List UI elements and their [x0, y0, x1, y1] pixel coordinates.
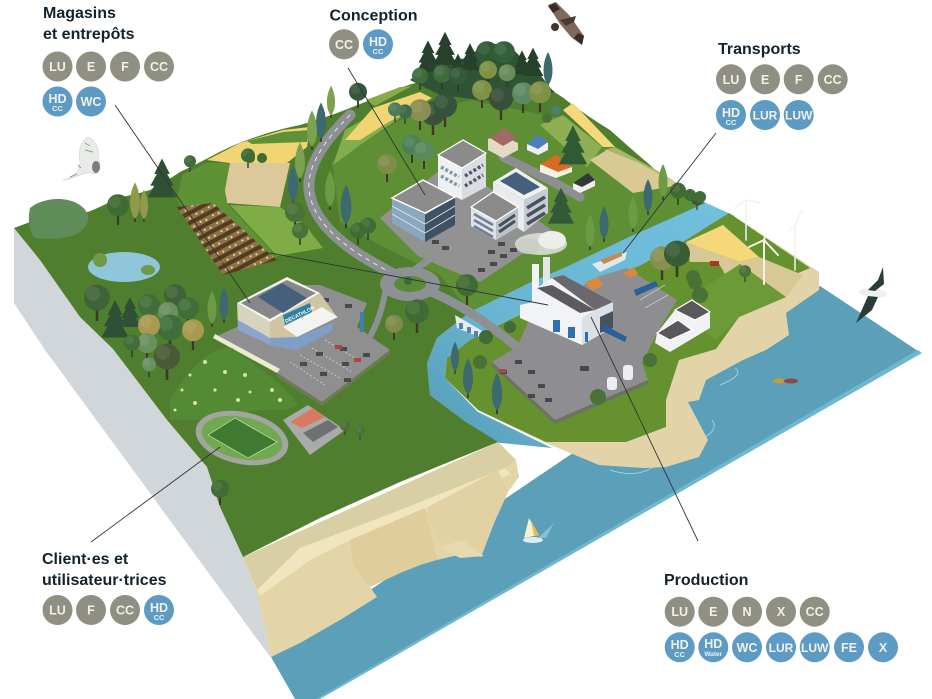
- field: green strip: [247, 130, 310, 144]
- west and north land: cliff sand: [243, 442, 519, 657]
- label: Conception: [329, 8, 418, 59]
- label: Magasins et entrepôts: Magasins: [43, 5, 116, 22]
- label: Transports: E: [761, 73, 769, 87]
- office: solar building: [493, 168, 548, 232]
- label: Client·es et utilisateur·trices: Client·es et: [42, 551, 129, 568]
- lighter central meadow: [332, 100, 700, 312]
- blue trucks: [602, 281, 658, 342]
- bird: seagull: [856, 267, 887, 323]
- west and north land: [14, 72, 705, 557]
- label: Production: LUR: [769, 641, 794, 655]
- label: Magasins et entrepôts: et entrepôts: [43, 26, 135, 43]
- label: Magasins et entrepôts: LU: [49, 60, 66, 74]
- label: Transports: F: [795, 73, 803, 87]
- field: tan: [225, 163, 290, 207]
- road: [309, 115, 580, 347]
- label: Conception: CC: [373, 47, 384, 56]
- trees: north forest: [349, 32, 561, 182]
- river bank shrubs: [245, 153, 706, 203]
- roundabout: [380, 267, 440, 301]
- office: white building: [438, 140, 486, 200]
- label: Magasins et entrepôts: E: [87, 60, 95, 74]
- label: Client·es et utilisateur·trices: LU: [49, 604, 66, 618]
- sea: [271, 286, 922, 699]
- label: Client·es et utilisateur·trices: utilisateur·trices: [42, 572, 167, 589]
- label: Production: [664, 572, 898, 662]
- fields above road: [333, 86, 432, 165]
- label: Production: WC: [737, 641, 757, 655]
- label: Production: N: [742, 605, 752, 619]
- label: Production: HD: [704, 637, 722, 651]
- label: Production: Water: [704, 651, 723, 658]
- label: Production: FE: [841, 641, 857, 655]
- label: Transports: HD: [722, 106, 740, 120]
- fields on the east hill: [540, 103, 680, 193]
- label: Transports: [716, 41, 848, 130]
- office parking lot: [380, 170, 555, 282]
- kayaks: [773, 378, 798, 384]
- pond: [88, 252, 160, 282]
- label: Client·es et utilisateur·trices: CC: [116, 604, 134, 618]
- label: Conception: CC: [335, 38, 353, 52]
- terrain side wall: [14, 228, 271, 658]
- river: [427, 202, 735, 448]
- field: light green: [230, 205, 323, 256]
- label: Magasins et entrepôts: HD: [48, 92, 67, 106]
- label: Magasins et entrepôts: CC: [150, 60, 168, 74]
- cliff shading: [243, 442, 516, 596]
- windsurfer: [523, 518, 554, 543]
- label: Magasins et entrepôts: [42, 5, 174, 116]
- label: Production: CC: [806, 605, 824, 619]
- label: Production: E: [709, 605, 717, 619]
- bird: owl: [63, 137, 100, 180]
- label: Client·es et utilisateur·trices: F: [87, 604, 95, 618]
- label: Conception: HD: [369, 35, 387, 49]
- peninsula and east land sand: [445, 213, 819, 468]
- label: Production: LUW: [801, 641, 829, 655]
- leader lines: [91, 68, 716, 542]
- wildflower garden: [170, 348, 298, 420]
- trees: east side: [548, 125, 751, 303]
- label: Client·es et utilisateur·trices: [42, 551, 174, 625]
- label: Transports: LUW: [785, 108, 813, 122]
- bridge: [455, 315, 484, 338]
- wind turbines: [735, 200, 802, 284]
- label: Transports: CC: [824, 73, 842, 87]
- store parking lot: [213, 285, 390, 406]
- label: Transports: LUR: [753, 108, 778, 122]
- tractor: [710, 261, 719, 266]
- fields near wind turbines: [686, 225, 803, 340]
- factory parking lot: [492, 268, 677, 424]
- label: Production: HD: [671, 638, 689, 652]
- label: Conception: Conception: [330, 8, 418, 24]
- field: green terraces: [177, 163, 277, 275]
- label: Production: X: [879, 641, 888, 655]
- label: Client·es et utilisateur·trices: CC: [154, 613, 165, 622]
- label: Production: X: [777, 605, 786, 619]
- barge: [592, 252, 627, 272]
- label: Client·es et utilisateur·trices: HD: [150, 601, 168, 615]
- office: glass building: [392, 180, 455, 242]
- label: Magasins et entrepôts: WC: [81, 95, 101, 109]
- label: Transports: Transports: [718, 41, 801, 58]
- sports track: [191, 403, 293, 473]
- label: Production: LU: [671, 605, 688, 619]
- houses: [488, 128, 595, 193]
- wood stacks: [585, 267, 638, 291]
- label: Magasins et entrepôts: F: [121, 60, 129, 74]
- store building: [237, 277, 364, 350]
- label: Production: CC: [674, 650, 686, 659]
- label: Transports: LU: [723, 73, 739, 87]
- field: crop rows: [177, 203, 277, 275]
- label: Production: Production: [664, 572, 748, 589]
- factory chimneys and smoke: [515, 231, 567, 304]
- sports court: [283, 405, 345, 455]
- peninsula and east land green: [445, 213, 810, 442]
- trees: peninsula and bridge: [385, 274, 657, 414]
- store sign: DECATHLON: [284, 305, 316, 325]
- office: low building: [471, 192, 518, 240]
- trees: west woodland: [29, 158, 365, 505]
- field: yellow: [207, 127, 310, 163]
- trees: along the road: [184, 86, 376, 245]
- factory: [520, 275, 658, 345]
- factory annex: [655, 300, 710, 352]
- water tanks: [607, 365, 633, 390]
- label: Magasins et entrepôts: CC: [52, 104, 63, 113]
- label: Transports: CC: [726, 118, 737, 127]
- bird: eagle: [548, 2, 584, 45]
